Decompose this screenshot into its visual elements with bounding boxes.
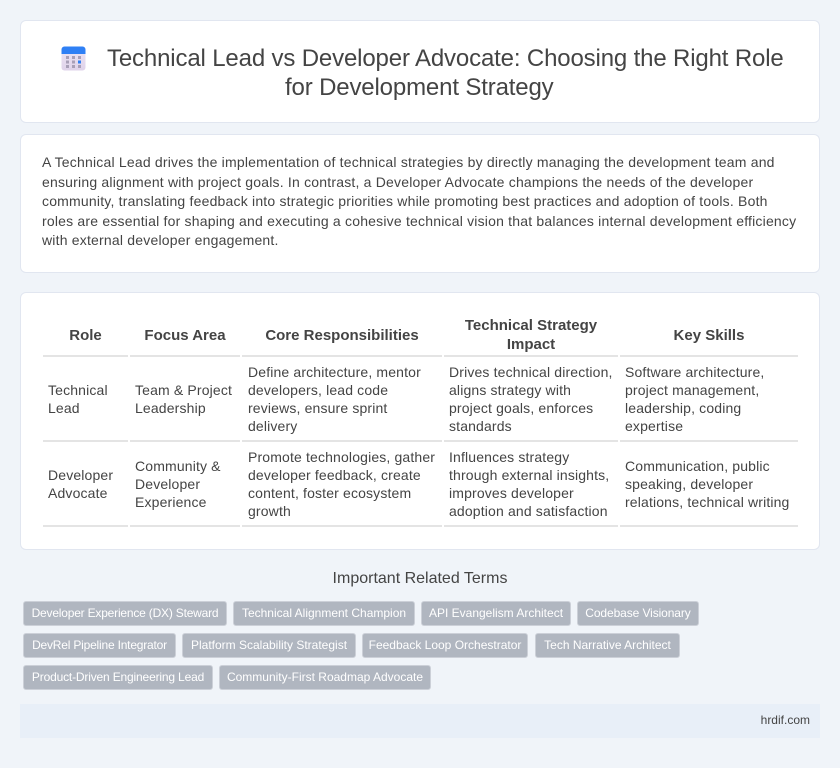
row: Technical Lead: Team & Project [135,382,232,398]
row: Developer Advocate: Experience [135,494,207,510]
related terms tags: Codebase Visionary [585,606,691,620]
row: Technical Lead: project management, [625,382,759,398]
row: Developer Advocate: Communication, public [625,458,770,474]
row: Developer Advocate: Community & [135,458,221,474]
title: Technical Lead vs Developer Advocate: Choosing the Right Role [107,45,784,72]
row: Developer Advocate: through external insights, [449,467,609,483]
header row: Impact [507,336,555,353]
row: Developer Advocate: Developer [135,476,200,492]
title: for Development Strategy [285,74,554,101]
related terms tags: Platform Scalability Strategist [191,638,347,652]
icon: calendar [62,46,86,70]
row: Technical Lead: Define architecture, mentor [248,364,421,380]
row: Developer Advocate: developer feedback, create [248,467,421,483]
header row: Focus Area [144,327,226,344]
related terms tags: DevRel Pipeline Integrator [32,638,167,652]
footer bar [20,704,820,738]
row: Technical Lead: expertise [625,418,683,434]
row: Technical Lead: leadership, coding [625,400,741,416]
row: Developer Advocate: speaking, developer [625,476,753,492]
header card [20,20,820,123]
row: Developer Advocate [48,449,790,519]
summary text: ensuring alignment with project goals. In contrast, a Developer Advocate champions the needs of the developer [42,174,753,190]
header row: Key Skills [674,327,744,344]
row: Developer Advocate: improves developer [449,485,574,501]
row: Technical Lead: Leadership [135,400,206,416]
row: Technical Lead: Software architecture, [625,364,764,380]
related terms tags: Technical Alignment Champion [242,606,406,620]
title [107,45,784,101]
header row: Core Responsibilities [265,327,419,344]
summary text: A Technical Lead drives the implementation of technical strategies by directly managing the development team and [42,154,775,170]
row: Developer Advocate: relations, technical writing [625,494,790,510]
row: Developer Advocate: Developer [48,467,113,483]
row: Developer Advocate: Advocate [48,485,108,501]
row: Technical Lead: reviews, ensure sprint [248,400,387,416]
row: Developer Advocate: Promote technologies, gather [248,449,435,465]
comparison table card [20,292,820,550]
summary text: community, translating feedback into strategic priorities while promoting best practices and adoption of tools. Both [42,193,768,209]
header row: Role [69,327,102,344]
related terms tags: Community-First Roadmap Advocate [227,670,423,684]
related terms tags: Tech Narrative Architect [544,638,671,652]
summary text: with external developer engagement. [42,232,279,248]
related terms tags [23,601,699,690]
row: Technical Lead: aligns strategy with [449,382,571,398]
header row [69,317,744,353]
table [43,317,798,527]
footer credit: hrdif.com [761,713,810,727]
related terms tags: API Evangelism Architect [429,606,563,620]
row: Technical Lead: delivery [248,418,297,434]
row: Technical Lead: standards [449,418,512,434]
row: Technical Lead: Drives technical direction, [449,364,613,380]
header row: Technical Strategy [465,317,597,334]
related terms tags: Developer Experience (DX) Steward [32,606,218,620]
summary card [20,134,820,273]
related terms tags: Product-Driven Engineering Lead [32,670,204,684]
row: Developer Advocate: growth [248,503,291,519]
row: Developer Advocate: adoption and satisfaction [449,503,608,519]
summary text [42,154,796,248]
row: Developer Advocate: Influences strategy [449,449,569,465]
related terms tags: Feedback Loop Orchestrator [369,638,521,652]
row: Technical Lead [48,364,764,434]
related terms heading: Important Related Terms [333,570,507,587]
row: Technical Lead: Technical [48,382,108,398]
summary text: roles are essential for shaping and executing a cohesive technical vision that balances internal development efficiency [42,213,796,229]
row: Developer Advocate: content, foster ecosystem [248,485,411,501]
row: Technical Lead: Lead [48,400,80,416]
row: Technical Lead: project goals, enforces [449,400,593,416]
row: Technical Lead: developers, lead code [248,382,388,398]
